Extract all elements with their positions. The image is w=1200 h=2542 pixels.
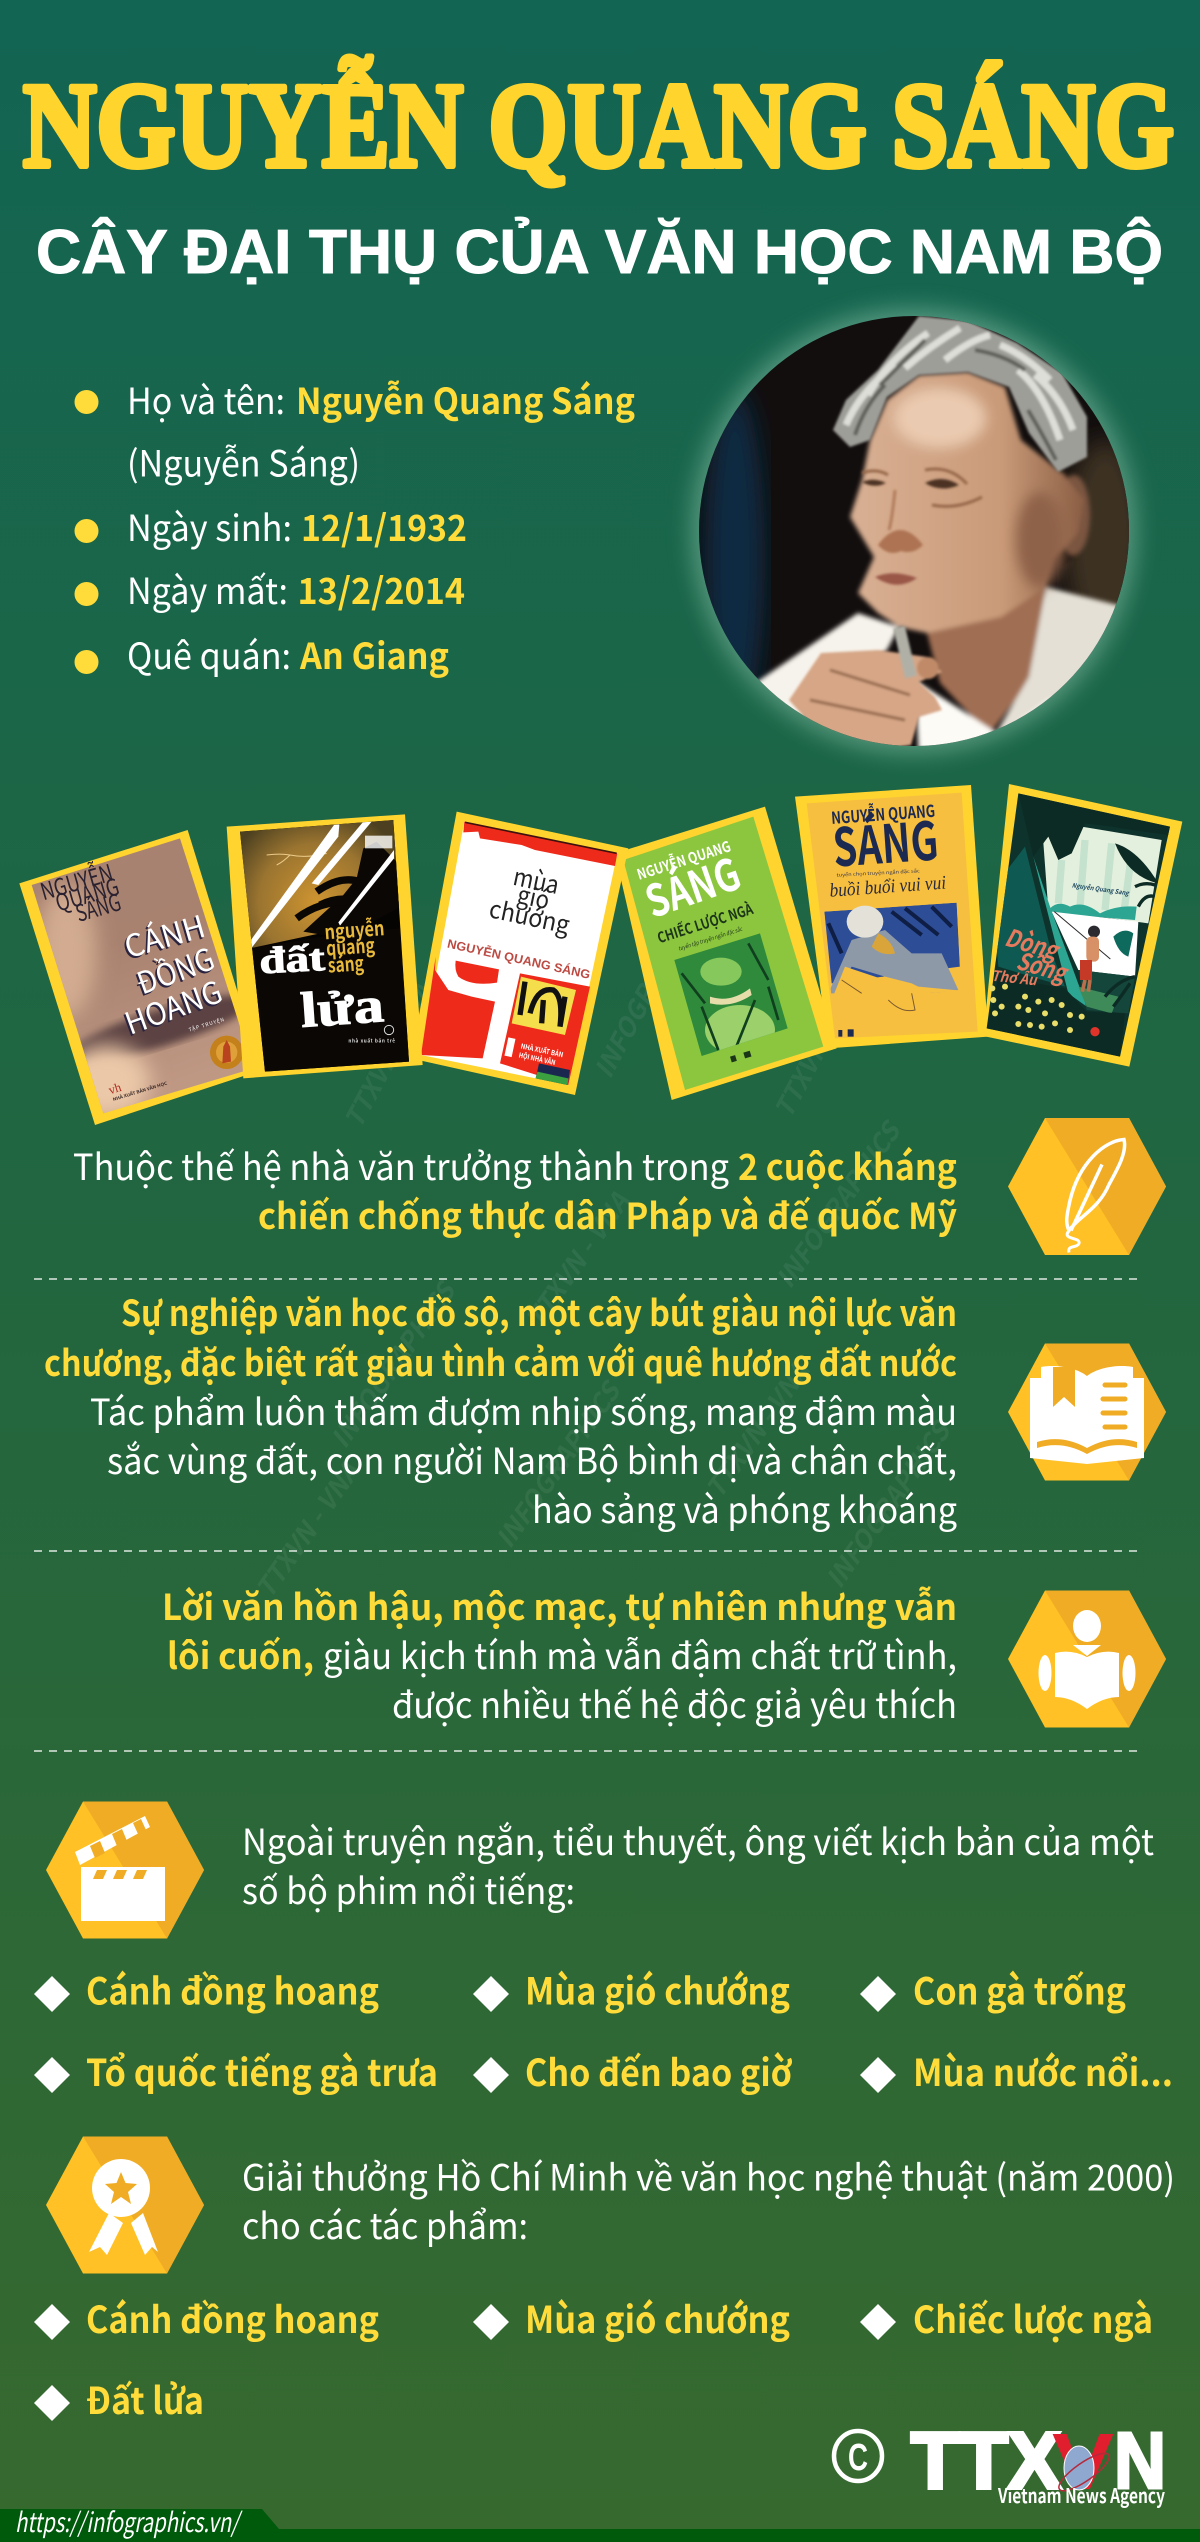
icon: open book bbox=[1008, 1344, 1166, 1480]
bullet: birth date: Ngày sinh: bbox=[127, 500, 292, 552]
book: Cánh đồng hoang: CÁNH bbox=[117, 903, 208, 969]
infographic: Nguyễn Quang Sáng: INFOGRAPHICS bbox=[321, 1272, 464, 1455]
list: films: Mùa nước nổi... bbox=[913, 2043, 1173, 2097]
bullet: birth date bbox=[74, 500, 467, 552]
book: Cánh đồng hoang: vh bbox=[107, 1080, 124, 1097]
list: films: Cho đến bao giờ bbox=[525, 2043, 793, 2097]
book: Mùa gió chướng: gió bbox=[514, 875, 553, 917]
section: generation bbox=[73, 1118, 1166, 1255]
icon: film clapperboard bbox=[46, 1802, 204, 1938]
list: awarded works: Mùa gió chướng bbox=[525, 2290, 790, 2344]
book: Cánh đồng hoang: SÁNG bbox=[71, 883, 124, 929]
book: Cánh đồng hoang: CÁNH bbox=[118, 901, 210, 967]
book: Dòng sông thơ ấu: Thơ Ấu bbox=[990, 965, 1039, 991]
bullet: home town bbox=[74, 628, 449, 680]
section: writing style bbox=[162, 1579, 1166, 1729]
list: awarded works: Đất lửa bbox=[86, 2371, 204, 2425]
text: writing style: giàu kịch tính mà vẫn đậm chất trữ tình, bbox=[323, 1628, 957, 1680]
book: Buồi buổi vui vui bbox=[795, 785, 988, 1048]
book: Mùa gió chướng: HỘI NHÀ VĂN bbox=[518, 1050, 557, 1068]
book: Dòng sông thơ ấu: Sông bbox=[1013, 941, 1073, 991]
book: Đất lửa: đất bbox=[258, 938, 326, 982]
text: film scripts intro bbox=[242, 1814, 1154, 1915]
text: generation bbox=[73, 1139, 957, 1240]
bullet: home town: Quê quán: bbox=[127, 628, 291, 680]
text: career: Tác phẩm luôn thấm đượm nhịp sống, mang đậm màu bbox=[90, 1384, 957, 1436]
list: films: Tổ quốc tiếng gà trưa bbox=[86, 2043, 438, 2097]
footer bar with url: https://infographics.vn/ bbox=[15, 2501, 243, 2540]
text: career: sắc vùng đất, con người Nam Bộ bình dị và chân chất, bbox=[107, 1433, 957, 1485]
text: award intro bbox=[242, 2150, 1175, 2250]
text: career: Sự nghiệp văn học đồ sộ, một cây bút giàu nội lực văn bbox=[121, 1285, 957, 1337]
book: Mùa gió chướng: chướng bbox=[486, 889, 573, 942]
book: Cánh đồng hoang: TẬP TRUYỆN bbox=[188, 1016, 225, 1034]
book: Cánh đồng hoang bbox=[19, 830, 262, 1125]
book: Cánh đồng hoang: QUANG bbox=[51, 868, 123, 918]
book: Chiếc lược ngà: tuyển tập truyện ngắn đặc sắc bbox=[677, 924, 744, 953]
icon: feather quill bbox=[1008, 1118, 1166, 1255]
text: award intro: Giải thưởng Hồ Chí Minh về văn học nghệ thuật (năm 2000) bbox=[242, 2150, 1175, 2202]
text: writing style bbox=[162, 1579, 957, 1729]
bullet: birth date: 12/1/1932 bbox=[301, 500, 467, 552]
text: writing style: được nhiều thế hệ độc giả yêu thích bbox=[392, 1677, 957, 1729]
logo: TTXVN bbox=[911, 2416, 1166, 2509]
text: film scripts intro: Ngoài truyện ngắn, tiểu thuyết, ông viết kịch bản của một bbox=[242, 1814, 1154, 1866]
book: Dòng sông thơ ấu: Nguyễn Quang Sang bbox=[1071, 880, 1131, 897]
bullet: name: Nguyễn Quang Sáng bbox=[296, 373, 635, 425]
infographic: Nguyễn Quang Sáng: INFOGRAPHICS bbox=[584, 893, 709, 1084]
book: Cánh đồng hoang: ĐỒNG bbox=[129, 934, 220, 1003]
infographic: Nguyễn Quang Sáng: INFOGRAPHICS bbox=[766, 1112, 909, 1295]
section: award bbox=[34, 2136, 1175, 2425]
text: career: hào sảng và phóng khoáng bbox=[532, 1482, 957, 1534]
section: film scripts bbox=[34, 1802, 1173, 2097]
list: awarded works: Cánh đồng hoang bbox=[86, 2290, 379, 2344]
subtitle: CÂY ĐẠI THỤ CỦA VĂN HỌC NAM BỘ bbox=[36, 218, 1163, 287]
bullet: name: (Nguyễn Sáng) bbox=[127, 436, 360, 488]
bullet: death date bbox=[74, 563, 465, 615]
book: Buồi buổi vui vui: tuyển chọn truyện ngắn đặc sắc bbox=[836, 866, 921, 879]
text: generation: 2 cuộc kháng bbox=[738, 1139, 957, 1191]
book: Cánh đồng hoang: HOANG bbox=[118, 967, 228, 1043]
book: Dòng sông thơ ấu bbox=[983, 784, 1182, 1067]
copyright symbol bbox=[834, 2431, 882, 2481]
text: career bbox=[44, 1285, 957, 1534]
text: award intro: cho các tác phẩm: bbox=[242, 2198, 528, 2250]
book covers row bbox=[19, 784, 1182, 1125]
list: films: Con gà trống bbox=[913, 1962, 1126, 2016]
list: films: Cánh đồng hoang bbox=[86, 1962, 379, 2016]
text: writing style: Lời văn hồn hậu, mộc mạc, tự nhiên nhưng vẫn bbox=[162, 1579, 957, 1631]
bullet: name: Họ và tên: bbox=[127, 373, 285, 425]
book: Chiếc lược ngà: SÁNG bbox=[636, 839, 748, 931]
book: Mùa gió chướng bbox=[411, 812, 628, 1095]
infographic: Nguyễn Quang Sáng: TTXVN - VNA bbox=[764, 967, 871, 1124]
book: Buồi buổi vui vui: buồi buổi vui vui bbox=[829, 873, 947, 902]
footer bar with url bbox=[0, 2501, 1200, 2542]
bullet: death date: 13/2/2014 bbox=[298, 563, 465, 615]
infographic: Nguyễn Quang Sáng: TTXVN - VNA bbox=[334, 977, 441, 1134]
book: Chiếc lược ngà bbox=[615, 807, 837, 1100]
book: Đất lửa: nhà xuất bản trẻ bbox=[348, 1037, 395, 1044]
list: films bbox=[34, 1962, 1173, 2097]
book: Mùa gió chướng: NGUYỄN QUANG SÁNG bbox=[446, 936, 592, 982]
book: Đất lửa: quang bbox=[325, 929, 376, 962]
text: writing style: lôi cuốn, bbox=[167, 1628, 314, 1680]
book: Buồi buổi vui vui: NGUYỄN QUANG bbox=[830, 798, 936, 829]
infographic: Nguyễn Quang Sáng: TTXVN - VNA bbox=[516, 1184, 637, 1335]
logo: TTXVN: V bbox=[1052, 2417, 1114, 2506]
text: generation: Thuộc thế hệ nhà văn trưởng thành trong bbox=[73, 1139, 729, 1191]
book: Buồi buổi vui vui: SÁNG bbox=[830, 799, 941, 883]
text: film scripts intro: số bộ phim nổi tiếng: bbox=[242, 1863, 575, 1915]
icon: award rosette bbox=[46, 2136, 204, 2274]
icon: person reading bbox=[1008, 1590, 1166, 1728]
bullet: name bbox=[74, 373, 635, 488]
book: Chiếc lược ngà: NGUYỄN QUANG bbox=[634, 835, 733, 885]
book: Đất lửa: lửa bbox=[299, 976, 386, 1038]
book: Mùa gió chướng: mùa bbox=[510, 857, 563, 902]
book: Cánh đồng hoang: ĐỒNG bbox=[128, 936, 218, 1005]
list: awarded works: Chiếc lược ngà bbox=[913, 2290, 1153, 2344]
text: career: chương, đặc biệt rất giàu tình cảm với quê hương đất nước bbox=[44, 1335, 957, 1387]
book: Cánh đồng hoang: HOANG bbox=[116, 969, 226, 1045]
portrait photo bbox=[690, 309, 1145, 760]
infographic: Nguyễn Quang Sáng: INFOGRAPHICS bbox=[816, 1412, 959, 1595]
infographic: Nguyễn Quang Sáng: TTXVN - VNA bbox=[696, 1354, 817, 1505]
infographic: Nguyễn Quang Sáng: TTXVN - VNA bbox=[246, 1454, 367, 1605]
biography facts bbox=[74, 373, 635, 680]
book: Mùa gió chướng: NHÀ XUẤT BẢN bbox=[520, 1040, 565, 1060]
book: Cánh đồng hoang: NHÀ XUẤT BẢN VĂN HỌC bbox=[112, 1079, 168, 1103]
book: Dòng sông thơ ấu: Dòng bbox=[1001, 918, 1065, 968]
logo: TTXVN: N bbox=[1114, 2416, 1166, 2505]
list: films: Mùa gió chướng bbox=[525, 1962, 790, 2016]
section: career bbox=[44, 1285, 1166, 1534]
book: Đất lửa: sáng bbox=[327, 947, 365, 979]
list: awarded works bbox=[34, 2290, 1153, 2425]
book: Đất lửa: nguyễn bbox=[323, 912, 385, 945]
logo: TTXVN: TTX bbox=[911, 2416, 1061, 2505]
book: Cánh đồng hoang: NGUYỄN bbox=[36, 854, 116, 907]
book: Đất lửa bbox=[227, 814, 423, 1078]
bullet: death date: Ngày mất: bbox=[127, 563, 288, 615]
bullet: home town: An Giang bbox=[299, 628, 449, 680]
infographic: Nguyễn Quang Sáng: INFOGRAPHICS bbox=[486, 1372, 629, 1555]
book: Chiếc lược ngà: CHIẾC LƯỢC NGÀ bbox=[655, 898, 756, 948]
copyright symbol: C bbox=[848, 2437, 868, 2479]
text: generation: chiến chống thực dân Pháp và đế quốc Mỹ bbox=[258, 1188, 957, 1240]
